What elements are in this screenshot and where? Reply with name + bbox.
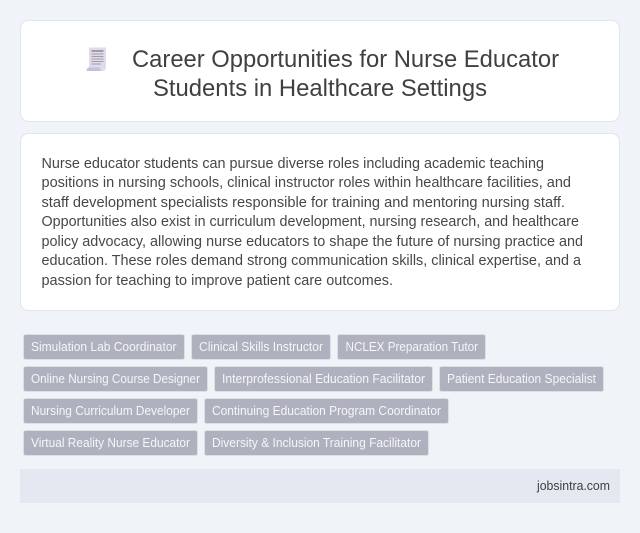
tag: Simulation Lab Coordinator: Simulation Lab Coordinator bbox=[31, 340, 176, 354]
text block: description: education. These roles demand strong communication skills, clinical expertise, and a bbox=[42, 253, 582, 269]
text block: description: Nurse educator students can pursue diverse roles including academic teaching bbox=[42, 156, 544, 172]
text block: description: policy advocacy, allowing nurse educators to shape the future of nursing practice and bbox=[42, 234, 583, 250]
text block: description bbox=[42, 156, 583, 289]
tag: Patient Education Specialist bbox=[440, 366, 604, 392]
tag: Clinical Skills Instructor: Clinical Skills Instructor bbox=[199, 340, 323, 354]
footer bbox=[20, 469, 620, 503]
text block: description: positions in nursing schools, clinical instructor roles within healthcare facilities, and bbox=[42, 175, 571, 191]
tag: Online Nursing Course Designer: Online Nursing Course Designer bbox=[31, 372, 200, 386]
tag: Interprofessional Education Facilitator bbox=[214, 366, 432, 392]
tag: Continuing Education Program Coordinator bbox=[204, 398, 448, 424]
text block: description: passion for teaching to improve patient care outcomes. bbox=[42, 273, 393, 289]
panel: description bbox=[20, 134, 620, 310]
tag: Nursing Curriculum Developer: Nursing Curriculum Developer bbox=[31, 404, 190, 418]
tag: Virtual Reality Nurse Educator bbox=[24, 430, 198, 456]
tag: Diversity & Inclusion Training Facilitator: Diversity & Inclusion Training Facilitator bbox=[212, 436, 421, 450]
tag: NCLEX Preparation Tutor bbox=[338, 334, 486, 360]
icon: document scroll bbox=[86, 48, 106, 71]
tag: Virtual Reality Nurse Educator: Virtual Reality Nurse Educator bbox=[31, 436, 190, 450]
panel: header bbox=[20, 20, 620, 122]
title bbox=[132, 46, 559, 102]
tag: Patient Education Specialist: Patient Education Specialist bbox=[447, 372, 596, 386]
footer source text: jobsintra.com bbox=[536, 479, 610, 493]
tag: Diversity & Inclusion Training Facilitator bbox=[204, 430, 428, 456]
tag: Continuing Education Program Coordinator: Continuing Education Program Coordinator bbox=[212, 404, 441, 418]
tag list bbox=[24, 334, 604, 456]
text block: description: staff development specialists responsible for training and mentoring nursing staff. bbox=[42, 195, 565, 211]
title: Students in Healthcare Settings bbox=[153, 75, 487, 102]
title: Career Opportunities for Nurse Educator bbox=[132, 46, 559, 73]
tag: Clinical Skills Instructor bbox=[192, 334, 330, 360]
tag: Nursing Curriculum Developer bbox=[24, 398, 198, 424]
tag: Simulation Lab Coordinator bbox=[24, 334, 184, 360]
tag: NCLEX Preparation Tutor: NCLEX Preparation Tutor bbox=[346, 340, 478, 354]
text block: description: Opportunities also exist in curriculum development, nursing research, and healthcare bbox=[42, 214, 579, 230]
tag: Online Nursing Course Designer bbox=[24, 366, 208, 392]
tag: Interprofessional Education Facilitator: Interprofessional Education Facilitator bbox=[222, 372, 425, 386]
